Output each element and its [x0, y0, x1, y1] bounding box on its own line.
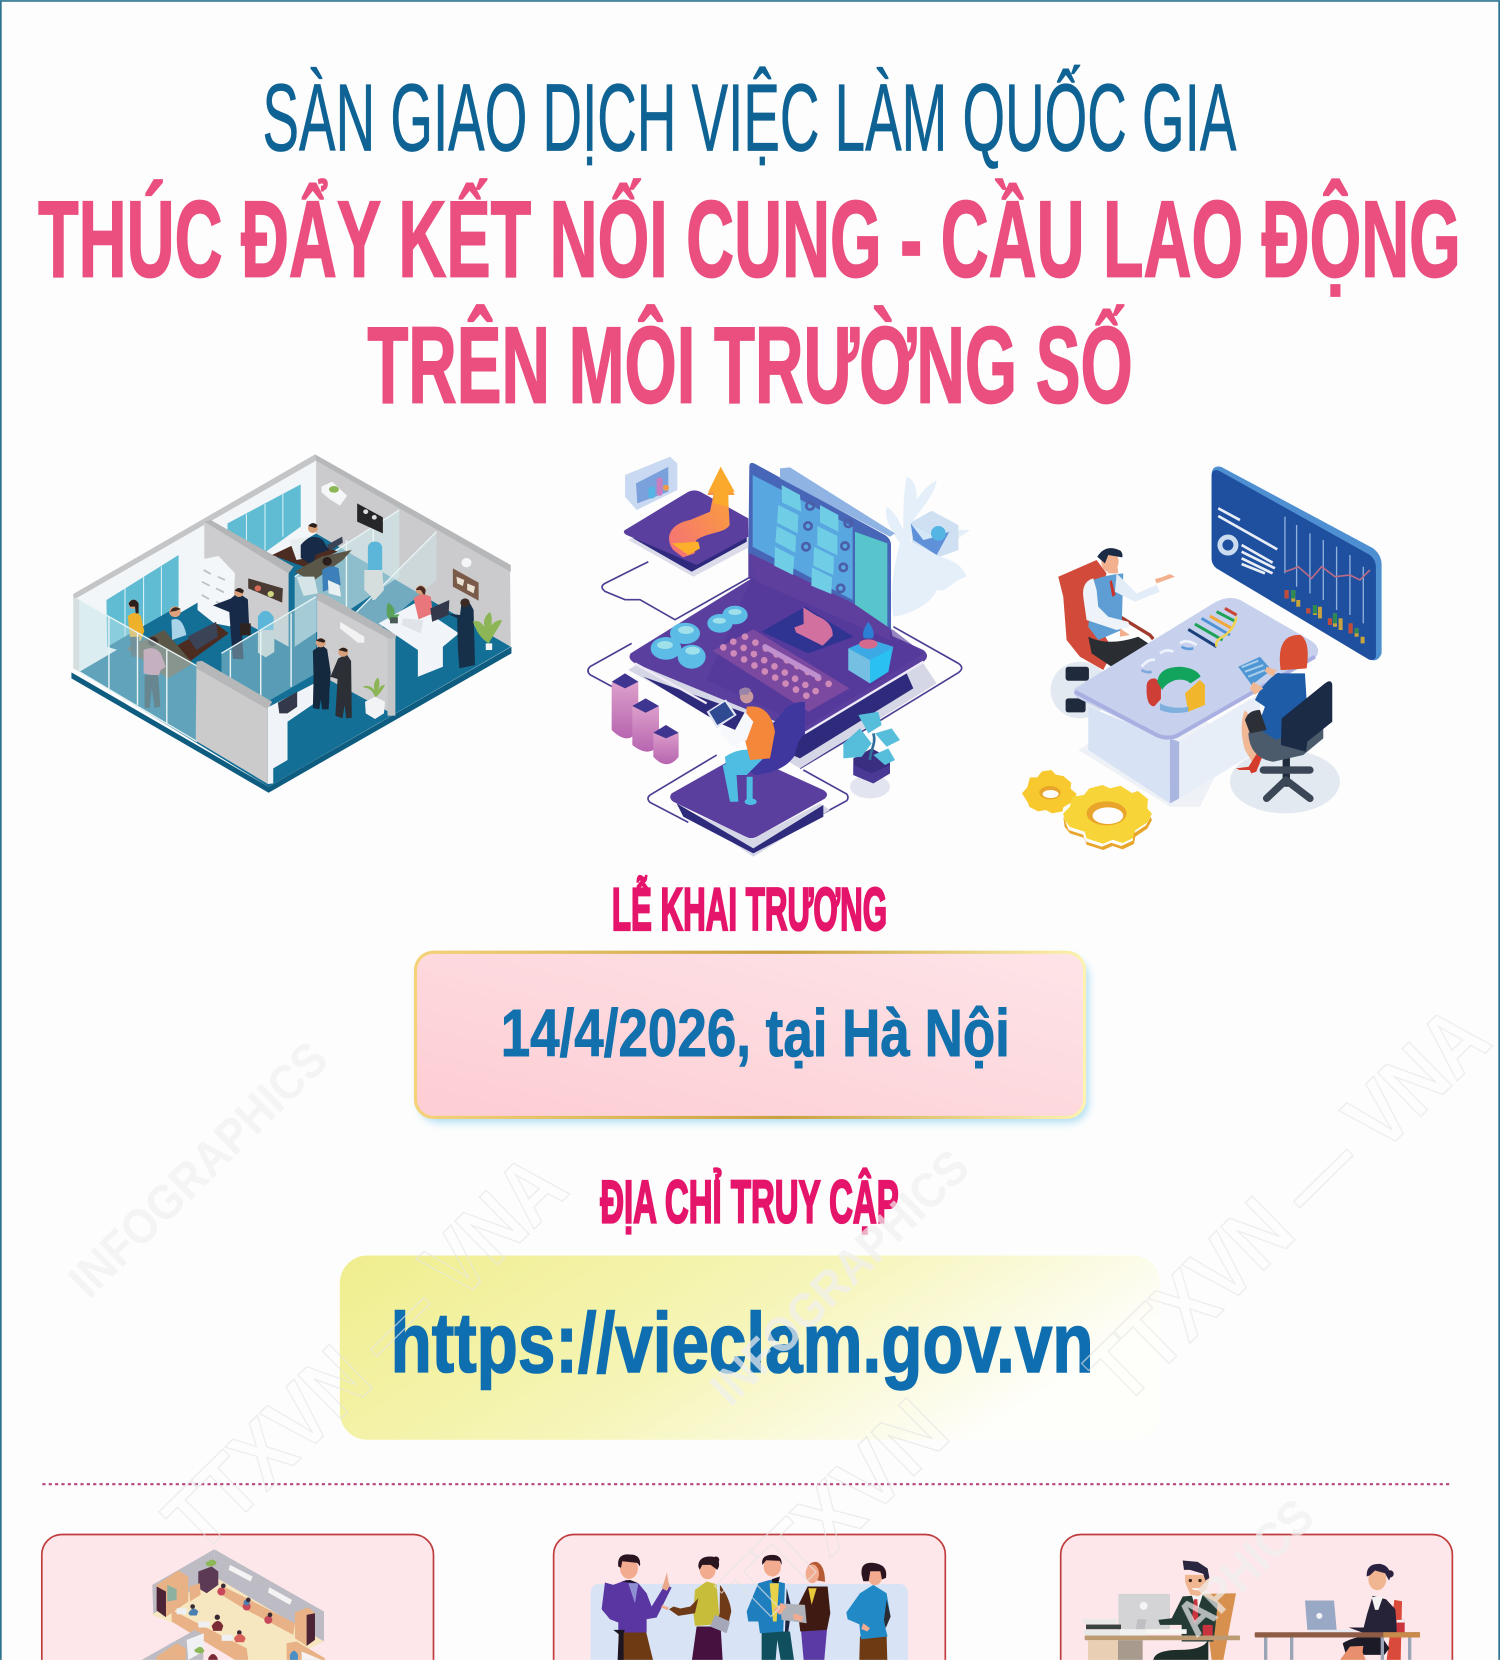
plant — [850, 775, 890, 798]
watermarks: INFOGRAPHICS — [59, 1032, 338, 1308]
woman — [1242, 710, 1260, 767]
dashboard panel — [1212, 466, 1382, 660]
worker with red hair — [773, 1562, 830, 1660]
leaf background — [886, 477, 970, 617]
desk room right — [379, 603, 459, 677]
coins — [651, 606, 748, 669]
worker in blue jacket — [747, 1555, 794, 1660]
floating chart card — [625, 457, 677, 510]
small platform with arrow — [628, 497, 750, 577]
lower platform — [670, 803, 830, 857]
main platform — [628, 660, 937, 768]
desk graph strips — [1188, 629, 1217, 647]
keyboard — [713, 629, 849, 712]
desk chart — [1147, 678, 1161, 706]
man in red chair — [1058, 560, 1113, 670]
partition grey front — [196, 665, 268, 784]
watermarks: TTXVN — VNA — [145, 1136, 584, 1570]
mouse pad — [762, 607, 853, 653]
date text: 14/4/2026, tại Hà Nội — [501, 997, 1010, 1071]
book and drop — [848, 639, 893, 683]
watermarks: TTXVN — [701, 1380, 967, 1644]
circuit lines — [588, 562, 962, 822]
glass partitions — [79, 600, 197, 742]
watermarks: INFOGRAPHICS — [700, 1140, 980, 1416]
data drums — [612, 673, 638, 738]
url text: https://vieclam.gov.vn — [391, 1295, 1094, 1390]
worker in teal jacket — [846, 1563, 891, 1660]
illustration: isometric open office — [142, 1549, 325, 1660]
watermarks: APHICS — [1166, 1489, 1325, 1647]
panel: workers card — [554, 1534, 945, 1660]
worker in yellow — [669, 1557, 731, 1660]
url panel — [340, 1256, 1160, 1440]
gears — [1022, 770, 1077, 813]
floor shadows — [1230, 750, 1340, 813]
seated person — [738, 702, 805, 775]
desk — [1088, 707, 1170, 803]
label: access address: ĐỊA CHỈ TRUY CẬP — [600, 1168, 899, 1236]
illustration: group of workers — [591, 1554, 908, 1660]
desk group left room — [198, 556, 235, 627]
meeting room top — [272, 538, 338, 567]
illustration: digital workstation platform — [588, 457, 970, 857]
watermarks — [59, 987, 1500, 1647]
plant pot — [365, 697, 385, 719]
illustration: interview at desks — [1083, 1561, 1420, 1660]
panel: office floor card — [42, 1534, 433, 1660]
monitor — [748, 463, 891, 630]
illustration: meeting with dashboard — [1022, 466, 1382, 850]
standing men handshake — [313, 645, 331, 709]
title — [38, 65, 1461, 426]
label: opening ceremony: LỄ KHAI TRƯƠNG — [612, 875, 887, 943]
woman at desk — [1255, 1564, 1420, 1660]
date panel — [415, 952, 1088, 1122]
illustration: isometric office — [71, 454, 511, 793]
panel: interview card — [1061, 1534, 1452, 1660]
worker in purple — [602, 1554, 672, 1660]
interviewer man — [1083, 1561, 1240, 1660]
